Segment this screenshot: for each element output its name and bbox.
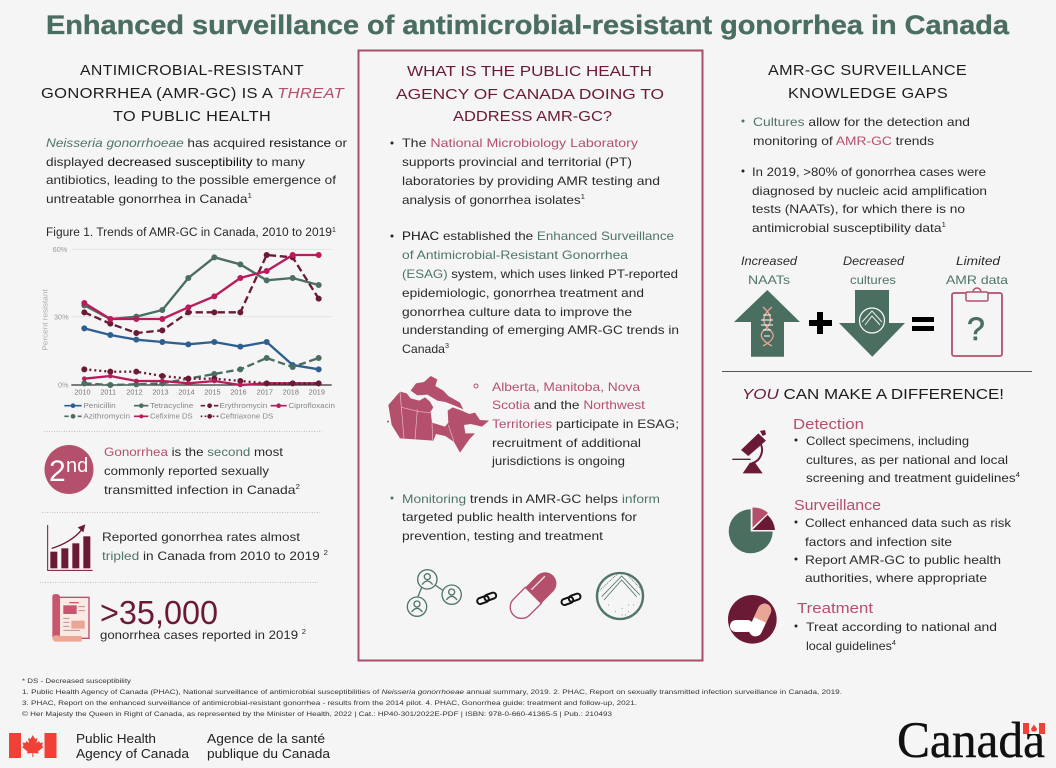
text: resistance intro: Neisseria gonorrhoeae has acquired resistance or bbox=[46, 136, 347, 150]
icon: rising bar chart bbox=[48, 524, 93, 570]
text: jurisdictions sub-bullet: Territories participate in ESAG; bbox=[492, 417, 679, 431]
text: resistance intro bbox=[46, 136, 347, 206]
stat: rates tripled: tripled in Canada from 2010 to 2019 bbox=[102, 549, 298, 563]
text: national lab bullet: supports provincial and territorial (PT) bbox=[402, 155, 632, 169]
heading: threat: ANTIMICROBIAL-RESISTANT bbox=[80, 62, 304, 79]
icon: up arrow with DNA bbox=[734, 290, 800, 357]
line chart: trends of AMR-GC: 2012 bbox=[126, 388, 143, 397]
logo: Canada wordmark: Canada bbox=[897, 713, 1045, 768]
panel: knowledge gaps bbox=[734, 62, 1008, 357]
footnotes: 1. Public Health Agency of Canada (PHAC), National surveillance of antimicrobial susceptibilities of Neisseria gonorrhoeae annual summary, 2019. 2. PHAC, Report on sexually transmitted infection surveillance in Canada, 2019. bbox=[22, 689, 842, 696]
heading: threat: TO PUBLIC HEALTH bbox=[113, 108, 271, 125]
line chart: trends of AMR-GC: 2017 bbox=[257, 388, 273, 397]
text: resistance intro: displayed decreased susceptibility to many bbox=[46, 155, 305, 169]
text: treatment bbox=[794, 600, 997, 653]
chart heading: Figure 1. Trends of AMR-GC in Canada, 2010 to 2019 bbox=[46, 227, 321, 239]
text: national lab bullet: The National Microbiology Laboratory bbox=[402, 136, 638, 150]
text: treatment: local guidelines bbox=[806, 639, 888, 653]
text: ESAG bullet: Canada bbox=[402, 342, 444, 356]
text: cultures bullet: Cultures allow for the detection and bbox=[753, 115, 970, 129]
icon: chain link bbox=[560, 593, 582, 606]
line chart: trends of AMR-GC: 2018 bbox=[283, 388, 299, 397]
logo: Public Health Agency of Canada: Public Health bbox=[76, 731, 156, 746]
text: jurisdictions sub-bullet: jurisdictions is ongoing bbox=[491, 454, 625, 468]
text: jurisdictions sub-bullet: recruitment of additional bbox=[492, 436, 641, 450]
icon: down arrow with culture plate bbox=[839, 290, 905, 357]
equation labels: NAATs bbox=[748, 273, 790, 287]
text: resistance intro: untreatable gonorrhea in Canada bbox=[46, 192, 222, 206]
chart legend: Azithromycin bbox=[83, 413, 130, 420]
icon: plus bbox=[809, 312, 832, 334]
footnotes: 3. PHAC, Report on the enhanced surveillance of antimicrobial-resistant gonorrhea - results from the 2014 pilot. 4. PHAC, Gonorrhea guide: treatment and follow-up, 2021. bbox=[22, 700, 637, 707]
text: cultures bullet: monitoring of AMR-GC trends bbox=[753, 134, 934, 148]
line chart: trends of AMR-GC: 2011 bbox=[100, 388, 116, 397]
text: national lab bullet bbox=[390, 136, 660, 207]
panel: threat bbox=[40, 62, 347, 642]
stat: second most reported: Gonorrhea is the second most bbox=[104, 445, 284, 459]
text: resistance intro: antibiotics, leading to the possible emergence of bbox=[46, 173, 337, 187]
text: jurisdictions sub-bullet: Scotia and the Northwest bbox=[492, 398, 646, 412]
text: ESAG bullet: (ESAG) system, which uses linked PT-reported bbox=[402, 267, 678, 281]
equation labels bbox=[741, 254, 1008, 287]
icon: pie chart bbox=[729, 507, 775, 553]
stat: cases reported: gonorrhea cases reported in 2019 bbox=[100, 628, 280, 642]
stat: second most reported: transmitted infection in Canada bbox=[104, 483, 269, 497]
chart legend: Ceftriaxone DS bbox=[220, 413, 274, 420]
text: ESAG bullet: gonorrhea culture data to improve the bbox=[402, 305, 632, 319]
text: NAATs bullet: tests (NAATs), for which there is no bbox=[752, 202, 965, 216]
line chart: trends of AMR-GC: 2015 bbox=[204, 388, 221, 397]
logo: Public Health Agency of Canada: Agency of Canada bbox=[76, 746, 190, 761]
stat: second most reported: 2 bbox=[295, 484, 300, 491]
text: national lab bullet: laboratories by providing AMR testing and bbox=[402, 174, 660, 188]
stat: rates tripled bbox=[48, 524, 328, 570]
equation labels: cultures bbox=[850, 273, 896, 287]
heading: PHAC: ADDRESS AMR-GC? bbox=[453, 108, 612, 125]
chart heading: 1 bbox=[332, 227, 336, 234]
text: monitoring bullet bbox=[390, 492, 660, 543]
text: resistance intro: 1 bbox=[248, 193, 252, 200]
icon: 2nd badge: 2 bbox=[49, 455, 66, 488]
chart legend bbox=[64, 403, 335, 420]
icon: clipboard with question mark: ? bbox=[967, 311, 985, 347]
text: ESAG bullet: of Antimicrobial-Resistant Gonorrhea bbox=[402, 248, 628, 262]
footnotes bbox=[22, 678, 842, 718]
stat: rates tripled: 2 bbox=[324, 550, 328, 557]
text: detection: Detection bbox=[793, 416, 864, 433]
text: NAATs bullet: diagnosed by nucleic acid amplification bbox=[752, 184, 987, 198]
stat: second most reported: commonly reported sexually bbox=[104, 464, 269, 478]
text: detection: screening and treatment guidelines bbox=[806, 471, 993, 485]
text: cultures bullet bbox=[742, 115, 970, 148]
line chart: trends of AMR-GC: 2013 bbox=[152, 388, 169, 397]
equation labels: Decreased bbox=[843, 254, 904, 268]
chart legend: Cefixime DS bbox=[150, 413, 193, 420]
chart legend: Penicillin bbox=[83, 403, 116, 410]
logo: Public Health Agency of Canada: publique du Canada bbox=[207, 746, 331, 761]
text: ESAG bullet: epidemiologic, gonorrhea treatment and bbox=[402, 286, 644, 300]
stat: cases reported: >35,000 bbox=[100, 594, 218, 631]
icon: equals bbox=[912, 317, 934, 331]
icon: linked people bbox=[407, 570, 461, 616]
icon: report book bbox=[52, 594, 89, 642]
line chart: trends of AMR-GC: 0% bbox=[58, 381, 69, 390]
line chart: trends of AMR-GC: 2010 bbox=[74, 388, 91, 397]
logo: Public Health Agency of Canada bbox=[9, 731, 331, 761]
line chart: trends of AMR-GC: Percent resistant bbox=[42, 289, 49, 351]
chart legend: Ciprofloxacin bbox=[288, 403, 335, 410]
text: NAATs bullet bbox=[742, 165, 987, 235]
text: jurisdictions sub-bullet bbox=[474, 380, 679, 468]
equation labels: Limited bbox=[956, 254, 1000, 268]
title: Enhanced surveillance of antimicrobial-resistant gonorrhea in Canada bbox=[46, 10, 1010, 40]
text: treatment: 4 bbox=[892, 640, 896, 647]
heading: PHAC bbox=[396, 63, 664, 125]
stat: cases reported: 2 bbox=[302, 629, 306, 636]
text: surveillance: Collect enhanced data such as risk bbox=[805, 516, 1012, 530]
text: NAATs bullet: antimicrobial susceptibility data bbox=[752, 221, 917, 235]
line chart: trends of AMR-GC: 30% bbox=[54, 312, 69, 321]
icon: clipboard with question mark bbox=[952, 288, 1002, 356]
panel: PHAC actions bbox=[358, 50, 702, 660]
text: monitoring bullet: prevention, testing and treatment bbox=[402, 529, 604, 543]
text: monitoring bullet: Monitoring trends in AMR-GC helps inform bbox=[402, 492, 660, 506]
heading: threat bbox=[41, 62, 346, 125]
line chart: trends of AMR-GC: 2016 bbox=[230, 388, 247, 397]
stat: cases reported bbox=[52, 594, 306, 642]
footnotes: * DS - Decreased susceptibility bbox=[22, 678, 132, 685]
icon: map of Canada bbox=[387, 376, 489, 453]
text: treatment: Treat according to national and bbox=[806, 620, 997, 634]
icon: microscope bbox=[732, 430, 766, 473]
text: national lab bullet: analysis of gonorrhea isolates bbox=[402, 193, 561, 207]
line chart: trends of AMR-GC bbox=[42, 245, 335, 420]
logo: Public Health Agency of Canada: Agence de la santé bbox=[207, 731, 325, 746]
chart legend: Tetracycline bbox=[150, 403, 193, 410]
panel: you can make a difference bbox=[728, 386, 1020, 653]
heading: knowledge gaps bbox=[768, 62, 967, 102]
text: jurisdictions sub-bullet: Alberta, Manitoba, Nova bbox=[492, 380, 640, 394]
equation labels: AMR data bbox=[946, 273, 1008, 287]
footnotes: © Her Majesty the Queen in Right of Canada, as represented by the Minister of Health, 2022 | Cat.: HP40-301/2022E-PDF | ISBN: 978-0-660-41365-5 | Pub.: 210493 bbox=[22, 710, 612, 718]
heading: knowledge gaps: AMR-GC SURVEILLANCE bbox=[768, 62, 967, 79]
text: surveillance: factors and infection site bbox=[805, 535, 952, 549]
icon: pills in circle bbox=[728, 595, 777, 644]
line chart: trends of AMR-GC: 2014 bbox=[178, 388, 195, 397]
icon row: people, antibiotics, culture plate bbox=[407, 568, 643, 623]
chart legend: Erythromycin bbox=[219, 403, 267, 410]
text: surveillance: Surveillance bbox=[794, 497, 881, 514]
text: ESAG bullet: 3 bbox=[445, 343, 449, 350]
text: ESAG bullet: understanding of emerging AMR-GC trends in bbox=[402, 323, 679, 337]
line chart: trends of AMR-GC: 2019 bbox=[309, 388, 325, 397]
stat: rates tripled: Reported gonorrhea rates almost bbox=[102, 530, 301, 544]
icon: capsule bbox=[506, 568, 561, 623]
heading: threat: GONORRHEA (AMR-GC) IS A THREAT bbox=[41, 85, 346, 102]
heading: PHAC: WHAT IS THE PUBLIC HEALTH bbox=[407, 63, 652, 80]
text: surveillance bbox=[794, 497, 1012, 585]
icon: culture plate bbox=[597, 573, 643, 619]
text: detection: Collect specimens, including bbox=[806, 434, 969, 448]
icon: 2nd badge: nd bbox=[66, 455, 88, 477]
text: ESAG bullet: PHAC established the Enhanced Surveillance bbox=[402, 229, 674, 243]
line chart: trends of AMR-GC: 60% bbox=[53, 245, 68, 254]
icon: 2nd badge bbox=[44, 445, 94, 494]
text: detection: cultures, as per national and local bbox=[806, 453, 1008, 467]
text: monitoring bullet: targeted public health interventions for bbox=[402, 510, 637, 524]
equation labels: Increased bbox=[741, 254, 797, 268]
text: ESAG bullet bbox=[390, 229, 679, 356]
text: surveillance: Report AMR-GC to public health bbox=[805, 553, 1001, 567]
text: NAATs bullet: In 2019, >80% of gonorrhea cases were bbox=[752, 165, 986, 179]
stat: second most reported bbox=[44, 445, 300, 497]
text: treatment: Treatment bbox=[797, 600, 874, 617]
text: NAATs bullet: 1 bbox=[942, 222, 946, 229]
text: detection bbox=[793, 416, 1020, 485]
icon: chain link bbox=[476, 592, 497, 605]
text: detection: 4 bbox=[1016, 472, 1020, 479]
heading: PHAC: AGENCY OF CANADA DOING TO bbox=[396, 86, 664, 103]
text: surveillance: authorities, where appropriate bbox=[805, 571, 987, 585]
heading: knowledge gaps: KNOWLEDGE GAPS bbox=[788, 85, 948, 102]
text: national lab bullet: 1 bbox=[581, 194, 585, 201]
heading: difference: YOU CAN MAKE A DIFFERENCE! bbox=[742, 386, 1004, 403]
